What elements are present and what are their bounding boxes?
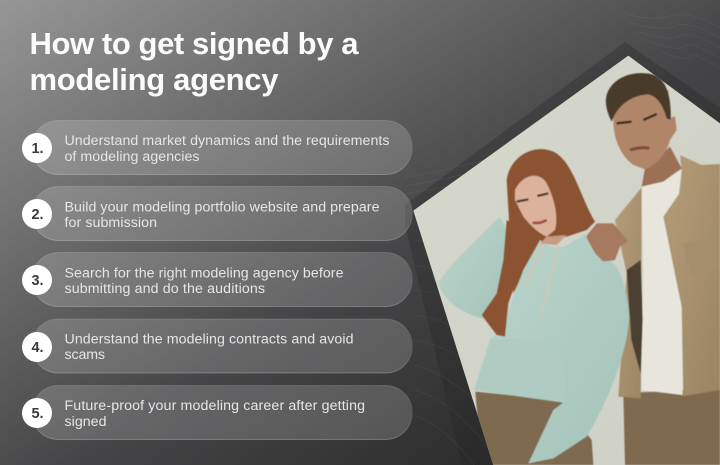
step 5: Future-proof your modeling career after getting <box>64 398 365 414</box>
man <box>606 73 720 465</box>
dark bands framing the photo <box>405 42 720 465</box>
step 2 <box>22 186 412 240</box>
title <box>30 26 359 97</box>
step 1: Understand market dynamics and the requirements <box>64 133 390 149</box>
step 5: signed <box>64 414 106 430</box>
title: modeling agency <box>30 62 279 97</box>
step 1 <box>22 120 412 174</box>
step 5: 5. <box>31 406 44 422</box>
step 2: 2. <box>31 207 44 223</box>
step 3 <box>22 252 412 306</box>
step 4: scams <box>64 347 105 363</box>
step 3: Search for the right modeling agency before <box>64 266 344 282</box>
step 3: submitting and do the auditions <box>64 281 265 297</box>
step 4: Understand the modeling contracts and avoid <box>64 332 354 348</box>
step 4 <box>22 319 412 373</box>
wave line texture <box>405 12 720 465</box>
step 3: 3. <box>31 273 44 289</box>
step 2: Build your modeling portfolio website and prepare <box>64 200 380 216</box>
woman <box>438 149 629 465</box>
step 1: 1. <box>31 141 44 157</box>
step 5 <box>22 386 412 440</box>
photo: two models on a pale backdrop <box>400 40 720 465</box>
step 4: 4. <box>31 340 44 356</box>
step 1: of modeling agencies <box>64 149 200 165</box>
step 2: for submission <box>64 215 157 231</box>
title: How to get signed by a <box>30 26 359 61</box>
